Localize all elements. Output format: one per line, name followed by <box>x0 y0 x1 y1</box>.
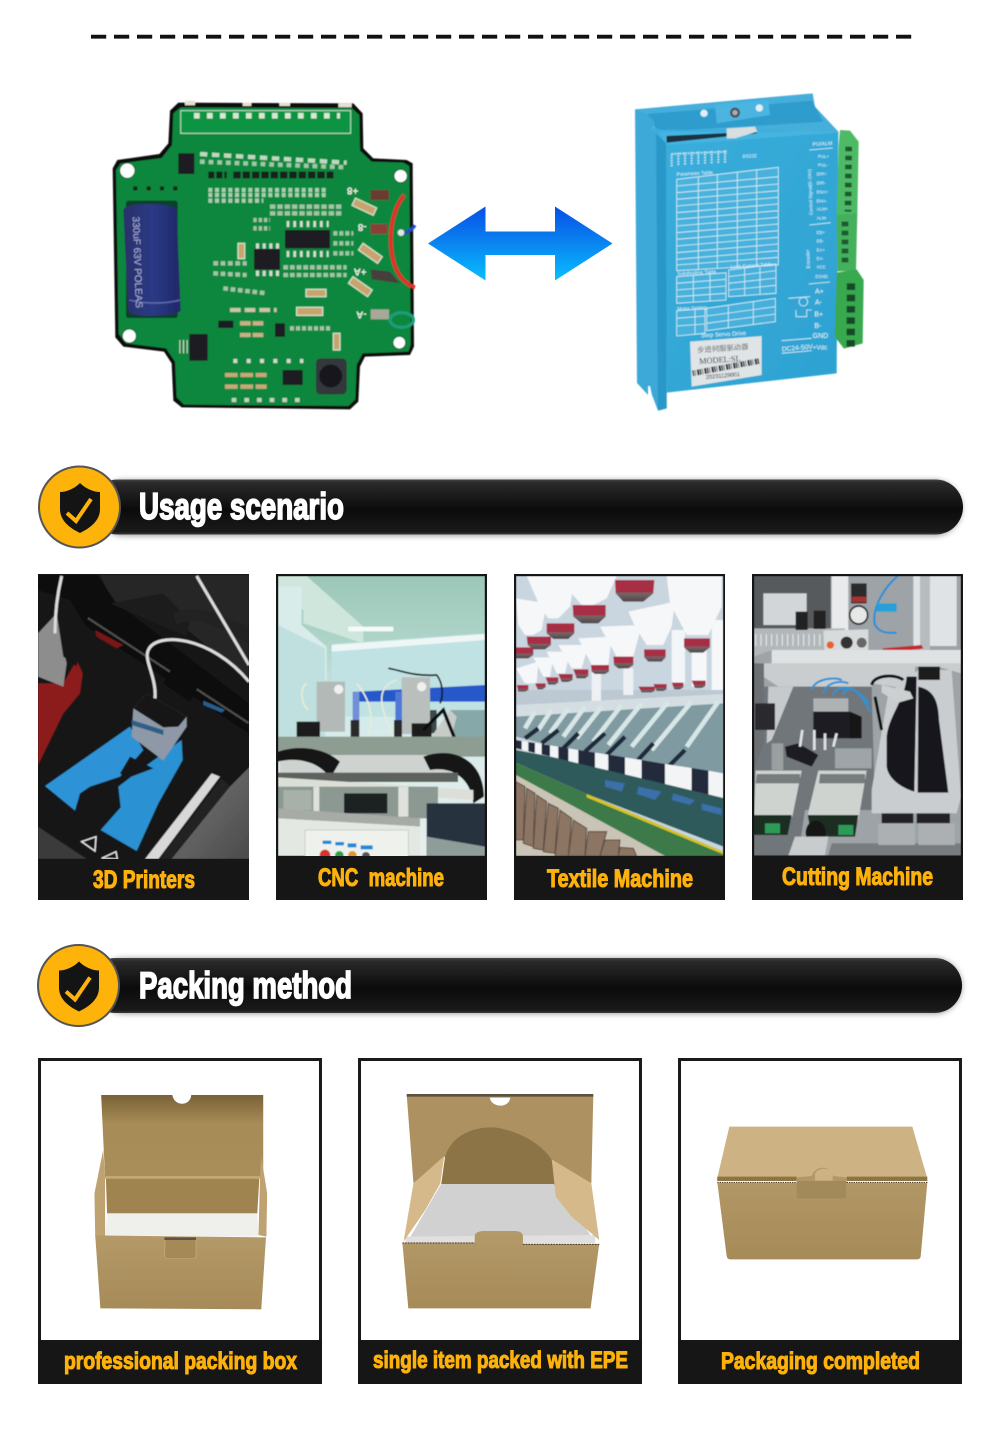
heading text: Packing method <box>139 965 352 1006</box>
panel text: RS232 <box>742 153 757 159</box>
brown tubes <box>516 782 637 856</box>
panel text: Step Servo Drive <box>701 331 747 339</box>
heading badge <box>38 945 119 1026</box>
photo: box with EPE foam <box>402 1094 599 1308</box>
green board <box>116 107 411 406</box>
dashed divider <box>91 35 912 39</box>
panel text: Motor Setting <box>677 305 707 313</box>
card: Cutting Machine <box>752 574 963 900</box>
left side face <box>635 109 667 411</box>
panel text: EA+ <box>817 248 825 253</box>
top bracket <box>635 93 838 132</box>
section heading: Usage scenario <box>39 466 963 548</box>
red, blue and green wires <box>390 195 415 327</box>
panel text: B- <box>814 323 822 330</box>
panel text: ENA+ <box>817 189 829 194</box>
product label <box>690 336 762 387</box>
panel text: PUL- <box>818 163 828 168</box>
panel text: ENA- <box>817 198 828 203</box>
panel text: B+ <box>814 312 823 319</box>
label: professional packing box: professional packing box <box>64 1348 298 1375</box>
solder pads and terminal labels: +A <box>354 265 367 276</box>
label: Packaging completed: Packaging completed <box>721 1348 920 1375</box>
panel text: Parameter Table <box>676 170 713 178</box>
silver beam <box>772 650 961 663</box>
roller arms <box>516 703 724 774</box>
panel text: Lock Current Table <box>730 262 773 271</box>
heading badge <box>39 466 120 548</box>
solder pads and terminal labels: +8 <box>346 184 358 195</box>
solder pads and terminal labels: -A <box>356 309 367 320</box>
connector header and through holes <box>181 101 352 133</box>
spindle caps <box>516 580 710 692</box>
panel text: DIR+ <box>817 172 827 177</box>
valve manifold <box>813 698 848 712</box>
panel text: A- <box>815 300 823 307</box>
panel text: PUL+ <box>818 154 829 159</box>
bobbin rollers <box>522 741 723 798</box>
label: single item packed with EPE: single item packed with EPE <box>373 1347 628 1374</box>
green base <box>516 763 723 856</box>
photo: blue step servo drive <box>635 93 864 411</box>
front panel <box>652 129 838 393</box>
heading text: Usage scenario <box>139 486 344 527</box>
label: CNC machine: CNC machine <box>318 864 444 892</box>
solder pads and terminal labels: -8 <box>357 221 367 232</box>
ceramic capacitors right <box>238 198 382 350</box>
panel text: EGND <box>815 274 828 279</box>
product label: 步进伺服驱动器 <box>697 342 749 355</box>
panel text: VCC <box>817 265 826 270</box>
card: Textile Machine <box>514 574 725 900</box>
photo: closed box <box>717 1127 927 1259</box>
capacitor: 330uF 63V POLEAS <box>130 216 144 309</box>
panel text: Control Signal(5~24V) <box>807 169 814 215</box>
panel text <box>676 141 833 353</box>
capacitor <box>123 201 181 318</box>
photo: open box with divider <box>94 1095 267 1309</box>
card: professional packing box <box>38 1060 322 1384</box>
label: 3D Printers: 3D Printers <box>93 866 195 894</box>
panel text: EB- <box>817 239 824 244</box>
card: CNC machine <box>276 574 487 900</box>
recessed top <box>647 101 823 132</box>
photo: stepper driver circuit board <box>113 101 415 409</box>
label: Textile Machine: Textile Machine <box>547 865 693 893</box>
green terminal blocks <box>835 130 864 349</box>
lower carriage <box>516 750 723 847</box>
product label: 20231129001 <box>706 372 740 381</box>
photo: textile spinning machine <box>516 576 723 856</box>
panel text: Encoder <box>805 249 812 268</box>
panel text: A+ <box>815 288 824 295</box>
parameter tables <box>672 148 833 353</box>
mounting holes <box>120 163 407 349</box>
section heading: Packing method <box>38 945 962 1026</box>
icon: double-headed blue arrow <box>428 206 612 280</box>
panel text: Subdividing Table <box>677 269 717 277</box>
photo: automated CNC line <box>278 576 485 860</box>
chip pins <box>179 224 329 347</box>
panel text: EA- <box>817 256 824 261</box>
panel text: DIR- <box>817 181 826 186</box>
panel text: PU/ALM <box>812 141 833 148</box>
machine bed <box>754 687 875 856</box>
black smd chips <box>178 153 347 394</box>
small smd parts <box>133 154 353 400</box>
card: 3D Printers <box>38 574 250 900</box>
photo: cutting machine conveyor <box>754 576 961 856</box>
card: Packaging completed <box>678 1060 962 1384</box>
dip switch slot and top bolt <box>667 100 770 143</box>
solder pads and terminal labels <box>346 184 400 320</box>
photo: 3D printer <box>38 575 250 859</box>
panel text: GND <box>813 333 828 340</box>
card: single item packed with EPE <box>358 1060 642 1384</box>
product label: MODEL:SL <box>699 354 741 366</box>
conveyor frame and belts <box>872 670 961 813</box>
panel text: EB+ <box>817 230 825 235</box>
driver modules <box>754 771 802 817</box>
yarn cones <box>516 576 722 683</box>
blue tubing <box>812 678 870 712</box>
panel text: ALM+ <box>817 207 829 212</box>
board outline <box>113 103 414 409</box>
label: Cutting Machine: Cutting Machine <box>782 863 933 891</box>
panel text: DC24-50V <box>782 344 814 353</box>
panel text: ALM- <box>817 216 828 221</box>
panel text: +Vdc <box>813 344 827 351</box>
